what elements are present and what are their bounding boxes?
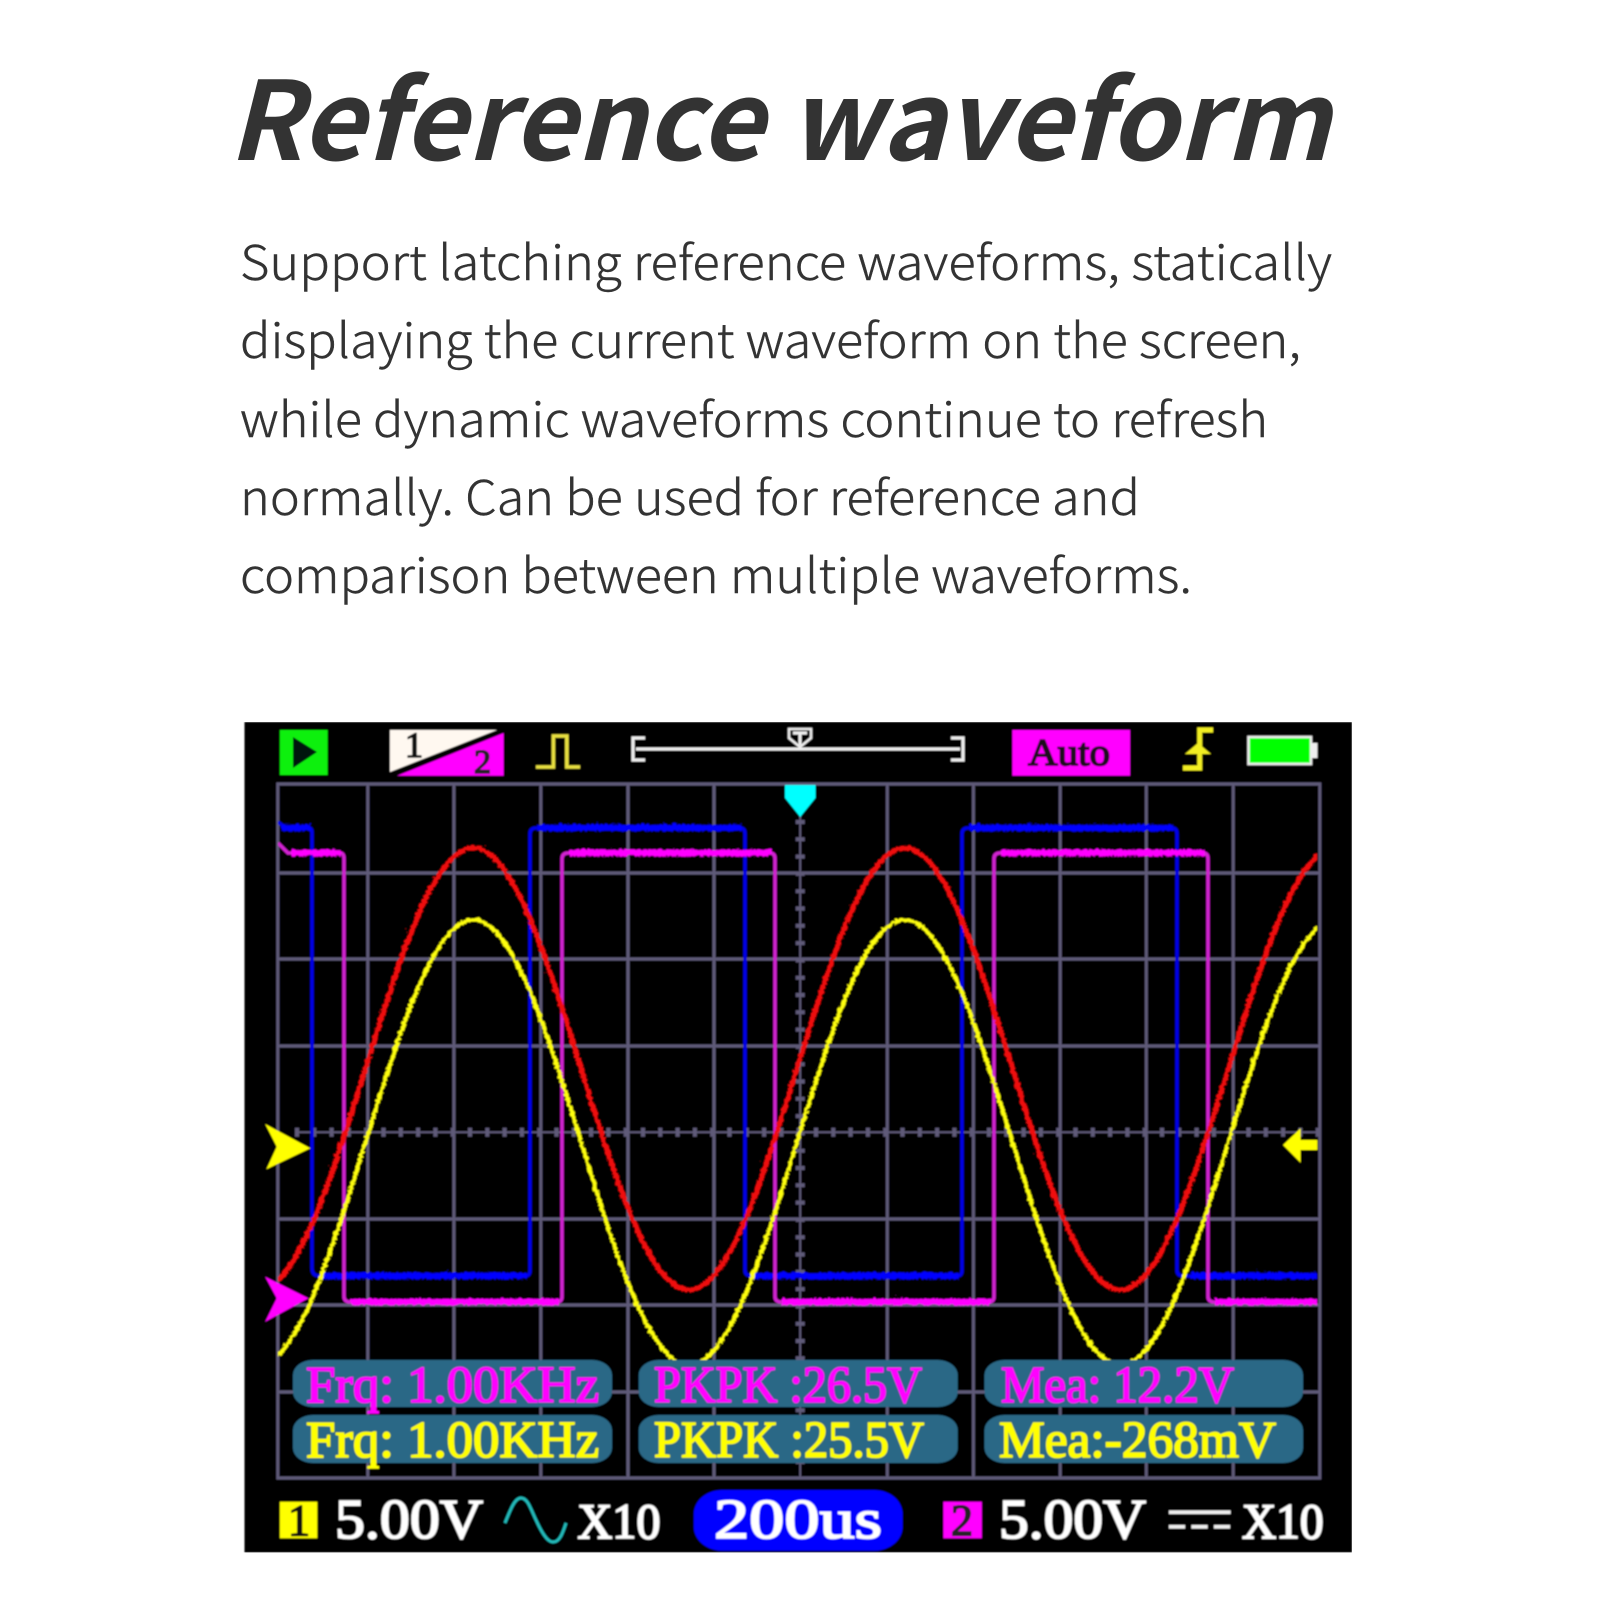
time position bar (633, 729, 963, 760)
channel 2 status: 2 (951, 1496, 973, 1545)
channel 1 status: X10 (578, 1493, 660, 1549)
description text block: Support latching reference waveforms, statically (240, 224, 1332, 294)
channel 1 status: 5.00V (335, 1489, 483, 1551)
channel 2 status: X10 (1242, 1493, 1324, 1549)
description text block (240, 224, 1332, 607)
icon: run state (280, 730, 328, 775)
waveform: red sine (276, 843, 1318, 1294)
channel 1 level marker (265, 1124, 310, 1169)
title: Reference waveform (228, 35, 1336, 192)
trigger position marker (785, 785, 816, 817)
waveforms (276, 820, 1318, 1362)
measurement: mean (984, 1357, 1303, 1469)
description text block: displaying the current waveform on the screen, (240, 302, 1301, 372)
timebase badge: 200us (714, 1489, 882, 1551)
measurement: mean: Mea:-268mV (999, 1412, 1276, 1469)
trigger level arrow (1283, 1128, 1317, 1163)
measurement: frequency: Frq: 1.00KHz (306, 1357, 599, 1414)
auto mode badge: Auto (1028, 732, 1110, 774)
waveform: magenta square (278, 843, 1317, 1302)
measurement: peak to peak: PKPK :26.5V (654, 1357, 922, 1414)
channel 1 status: 1 (288, 1496, 310, 1545)
description text block: normally. Can be used for reference and (240, 459, 1140, 529)
measurement grid (278, 784, 1320, 1478)
measurement: peak to peak: PKPK :25.5V (654, 1412, 924, 1469)
waveform: blue square reference (278, 822, 1317, 1276)
channel 2 status: 5.00V (999, 1489, 1146, 1551)
icon: channel 1/2 selector (390, 725, 504, 781)
icon: channel 1/2 selector: 1 (405, 725, 423, 765)
channel 2 status (944, 1489, 1324, 1551)
description text block: comparison between multiple waveforms. (240, 537, 1192, 607)
channel 2 level marker (265, 1277, 308, 1322)
description text block: while dynamic waveforms continue to refresh (240, 381, 1268, 451)
measurement: frequency (293, 1357, 612, 1469)
icon: trigger edge (1183, 730, 1213, 768)
waveform: yellow sine (276, 916, 1318, 1362)
icon: battery (1248, 737, 1317, 764)
channel 1 status (280, 1489, 660, 1551)
timebase badge (694, 1489, 903, 1551)
measurement: frequency: Frq: 1.00KHz (306, 1412, 599, 1469)
auto mode badge (1012, 730, 1130, 776)
icon: pulse (536, 736, 580, 767)
icon: channel 1/2 selector: 2 (474, 744, 491, 781)
panel: oscilloscope screen (243, 722, 1352, 1552)
measurement: mean: Mea: 12.2V (1001, 1357, 1234, 1414)
measurement: peak to peak (639, 1357, 958, 1469)
